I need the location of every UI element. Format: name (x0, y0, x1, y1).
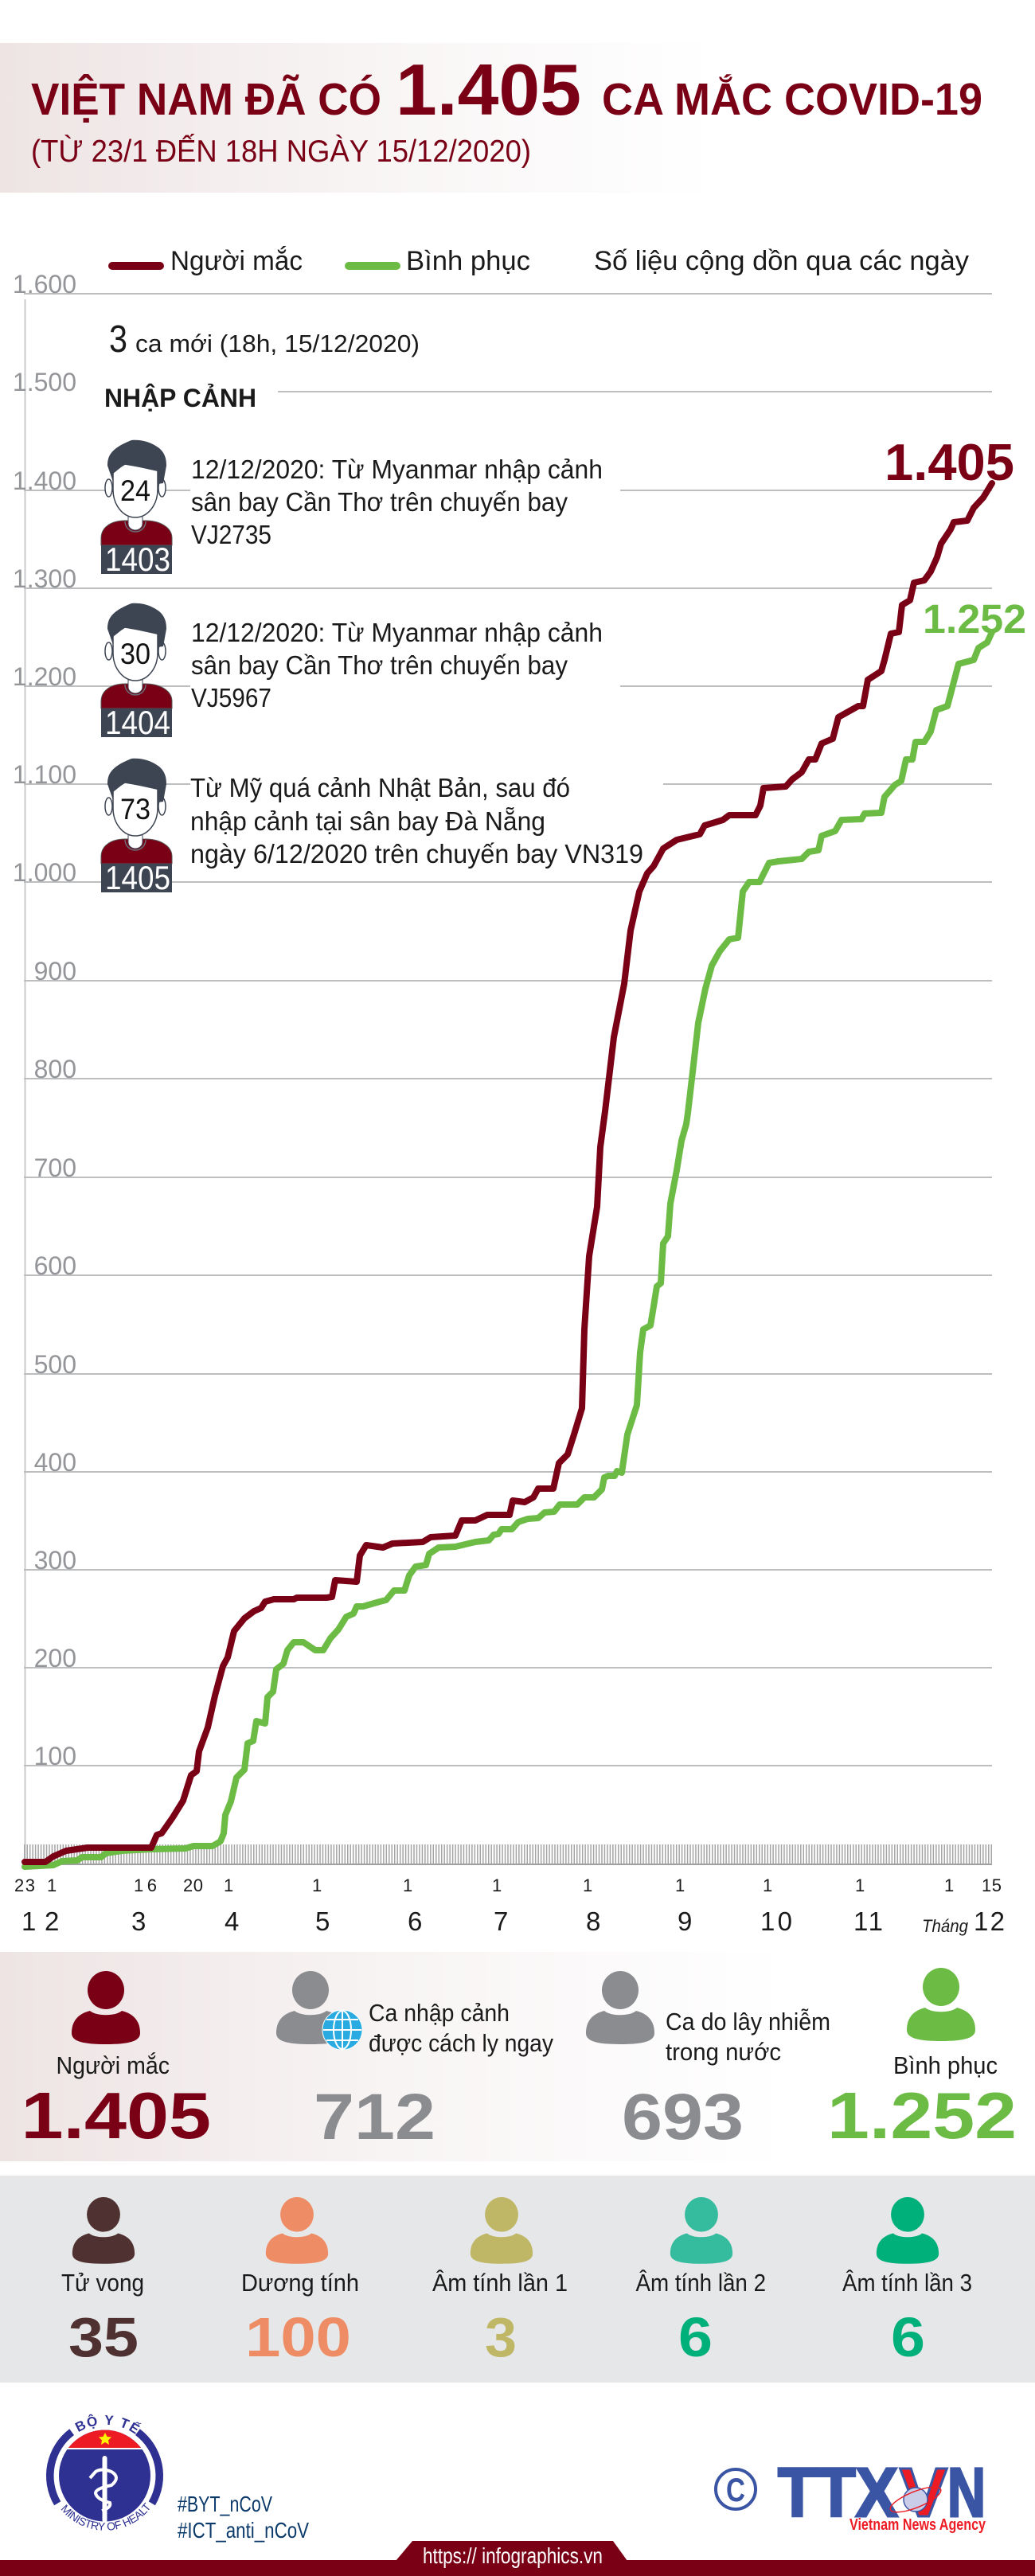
y-axis labels: 300 (34, 1546, 76, 1575)
subtitle: (TỪ 23/1 ĐẾN 18H NGÀY 15/12/2020) (31, 134, 531, 169)
y-axis labels: 200 (34, 1644, 76, 1672)
label: domestic: trong nước (666, 2038, 781, 2066)
x-axis month labels: 12 (974, 1907, 1005, 1936)
title: VIỆT NAM ĐÃ CÓ (31, 73, 381, 125)
value: domestic: 693 (622, 2081, 744, 2153)
x-axis day labels: 1 (763, 1875, 772, 1895)
icon: copyright: C (726, 2471, 745, 2508)
y-axis labels: 800 (34, 1055, 76, 1083)
patient 1403: 24 (120, 474, 150, 507)
y-axis labels (13, 270, 76, 1770)
section heading: imported cases: NHẬP CẢNH (104, 384, 256, 412)
line chart (13, 270, 1026, 1936)
cases curve (25, 483, 992, 1862)
recovered curve (25, 632, 992, 1867)
label: negative thrice: Âm tính lần 3 (842, 2269, 972, 2297)
x-axis month labels: 9 (678, 1907, 692, 1936)
icon: copyright (716, 2469, 756, 2509)
legend: Bình phục (406, 246, 530, 276)
hashtags: #BYT_nCoV (178, 2492, 272, 2516)
label: imported (369, 1999, 553, 2057)
footer bar: https:// infographics.vn (423, 2543, 603, 2568)
y-axis labels: 500 (34, 1350, 76, 1379)
x-axis day labels: 1 (492, 1875, 502, 1895)
x-axis month labels: 1 (21, 1907, 36, 1936)
y-axis labels: 700 (34, 1153, 76, 1182)
end value: recovered: 1.252 (923, 596, 1026, 642)
patient 1404 details: VJ5967 (191, 683, 271, 712)
patient 1403 details (191, 455, 603, 549)
footer bar (0, 2541, 1035, 2576)
label: negative once: Âm tính lần 1 (432, 2269, 568, 2297)
panel: outcomes (0, 2176, 1035, 2383)
logo: ministry of health: MINISTRY OF HEALTH (61, 2503, 150, 2531)
hatched day ticks on x-axis (24, 1844, 992, 1864)
y-axis labels: 1.000 (13, 858, 76, 887)
y-axis labels: 1.500 (13, 368, 76, 396)
x-axis month labels: Tháng (922, 1916, 969, 1936)
logo: ministry of health: BỘ Y TẾ (75, 2414, 142, 2434)
patient 1405 (101, 759, 643, 896)
patient 1405: 73 (120, 793, 150, 825)
icon: negative once (471, 2197, 533, 2264)
x-axis day labels: 15 (982, 1875, 1002, 1895)
x-axis day labels: 1 (855, 1875, 865, 1895)
patient 1404: 30 (120, 638, 150, 670)
x-axis day labels: 1 (312, 1875, 322, 1895)
icon: person domestic (586, 1971, 654, 2044)
value: negative once: 3 (485, 2306, 517, 2368)
icon: person imported with globe (276, 1971, 362, 2050)
patient 1404: 1404 (105, 704, 170, 741)
icon: negative thrice (877, 2197, 939, 2264)
logo: TTXVN (778, 2454, 986, 2534)
x-axis month labels: 3 (131, 1907, 146, 1936)
x-axis month labels: 5 (315, 1907, 330, 1936)
value: deaths: 35 (68, 2306, 139, 2368)
legend: Người mắc (170, 246, 303, 276)
y-axis labels: 100 (34, 1742, 76, 1770)
label: domestic: Ca do lây nhiễm (666, 2008, 830, 2035)
x-axis month labels: 4 (225, 1907, 239, 1936)
icon: negative twice (670, 2197, 732, 2264)
x-axis month labels: 7 (494, 1907, 508, 1936)
patient 1403 details: sân bay Cần Thơ trên chuyến bay (191, 487, 568, 517)
value: imported: 712 (314, 2081, 435, 2153)
patient 1405 details: ngày 6/12/2020 trên chuyến bay VN319 (190, 839, 643, 868)
new cases heading (109, 318, 420, 361)
y-axis labels: 900 (34, 957, 76, 986)
logo: TTXVN: Vietnam News Agency (849, 2516, 986, 2534)
label: imported: Ca nhập cảnh (369, 1999, 510, 2027)
y-axis labels: 1.400 (13, 466, 76, 495)
logo: TTXVN: N (947, 2454, 986, 2531)
logo: TTXVN: TTX (778, 2454, 898, 2531)
label: recovered: Bình phục (893, 2051, 998, 2079)
panel: totals (0, 1952, 1017, 2161)
x-axis day labels: 20 (183, 1875, 203, 1895)
label: negative twice: Âm tính lần 2 (635, 2269, 766, 2297)
patient 1405 details: Từ Mỹ quá cảnh Nhật Bản, sau đó (190, 773, 570, 802)
legend: Số liệu cộng dồn qua các ngày (594, 246, 969, 276)
icon: positive (266, 2197, 328, 2264)
patient 1403 (101, 440, 603, 578)
icon: person recovered (907, 1968, 975, 2041)
value: negative twice: 6 (678, 2306, 713, 2368)
title: 1.405 (396, 50, 581, 131)
x-axis day labels: 1 (675, 1875, 685, 1895)
new cases heading: 3 (109, 318, 127, 361)
title (31, 50, 982, 131)
x-axis month labels: 2 (45, 1907, 59, 1936)
patient 1404 (101, 603, 603, 741)
x-axis day labels: 23 (14, 1875, 35, 1895)
hashtags (178, 2492, 309, 2543)
y-axis labels: 1.100 (13, 760, 76, 789)
x-axis day labels: 1 (944, 1875, 954, 1895)
patient 1403: 1403 (105, 541, 170, 578)
value: negative thrice: 6 (891, 2306, 925, 2368)
x-axis day labels: 1 (224, 1875, 233, 1895)
x-axis day labels: 1 (47, 1875, 57, 1895)
value: positive: 100 (245, 2306, 351, 2368)
label: imported: được cách ly ngay (369, 2029, 553, 2057)
y-axis labels: 1.600 (13, 270, 76, 299)
x-axis day labels: 1 (583, 1875, 592, 1895)
legend (112, 246, 969, 276)
label: cases: Người mắc (56, 2051, 170, 2079)
y-axis labels: 1.300 (13, 564, 76, 593)
title: CA MẮC COVID-19 (602, 73, 982, 125)
hashtags: #ICT_anti_nCoV (178, 2518, 309, 2543)
patient 1404 details: sân bay Cần Thơ trên chuyến bay (191, 650, 568, 680)
patient 1404 details (191, 618, 603, 712)
y-axis labels: 1.200 (13, 662, 76, 691)
label: positive: Dương tính (241, 2269, 359, 2297)
header band (0, 43, 982, 193)
x-axis day labels: 1 (403, 1875, 412, 1895)
value: recovered: 1.252 (827, 2078, 1017, 2153)
patient 1403 details: VJ2735 (191, 520, 271, 549)
patient 1405 details (190, 773, 643, 868)
x-axis month labels: 11 (853, 1907, 883, 1936)
y-axis labels: 400 (34, 1448, 76, 1477)
x-axis month labels: 6 (408, 1907, 422, 1936)
x-axis month labels: 8 (586, 1907, 600, 1936)
label: domestic (666, 2008, 830, 2066)
patient 1403 details: 12/12/2020: Từ Myanmar nhập cảnh (191, 455, 603, 484)
new cases heading: ca mới (18h, 15/12/2020) (135, 330, 420, 357)
patient 1404 details: 12/12/2020: Từ Myanmar nhập cảnh (191, 618, 603, 647)
x-axis day labels: 16 (134, 1875, 157, 1895)
icon: deaths (72, 2197, 135, 2264)
label: deaths: Tử vong (61, 2269, 144, 2297)
y-axis labels: 600 (34, 1251, 76, 1280)
x-axis day labels (14, 1875, 1002, 1895)
x-axis month labels (21, 1907, 1005, 1936)
patient 1405: 1405 (105, 859, 170, 896)
logo: TTXVN: V (900, 2454, 947, 2531)
icon: person cases (72, 1971, 140, 2044)
value: cases: 1.405 (21, 2078, 211, 2153)
x-axis month labels: 10 (760, 1907, 792, 1936)
end value: cases: 1.405 (885, 433, 1014, 491)
patient 1405 details: nhập cảnh tại sân bay Đà Nẵng (190, 806, 545, 836)
logo: ministry of health (46, 2414, 163, 2531)
